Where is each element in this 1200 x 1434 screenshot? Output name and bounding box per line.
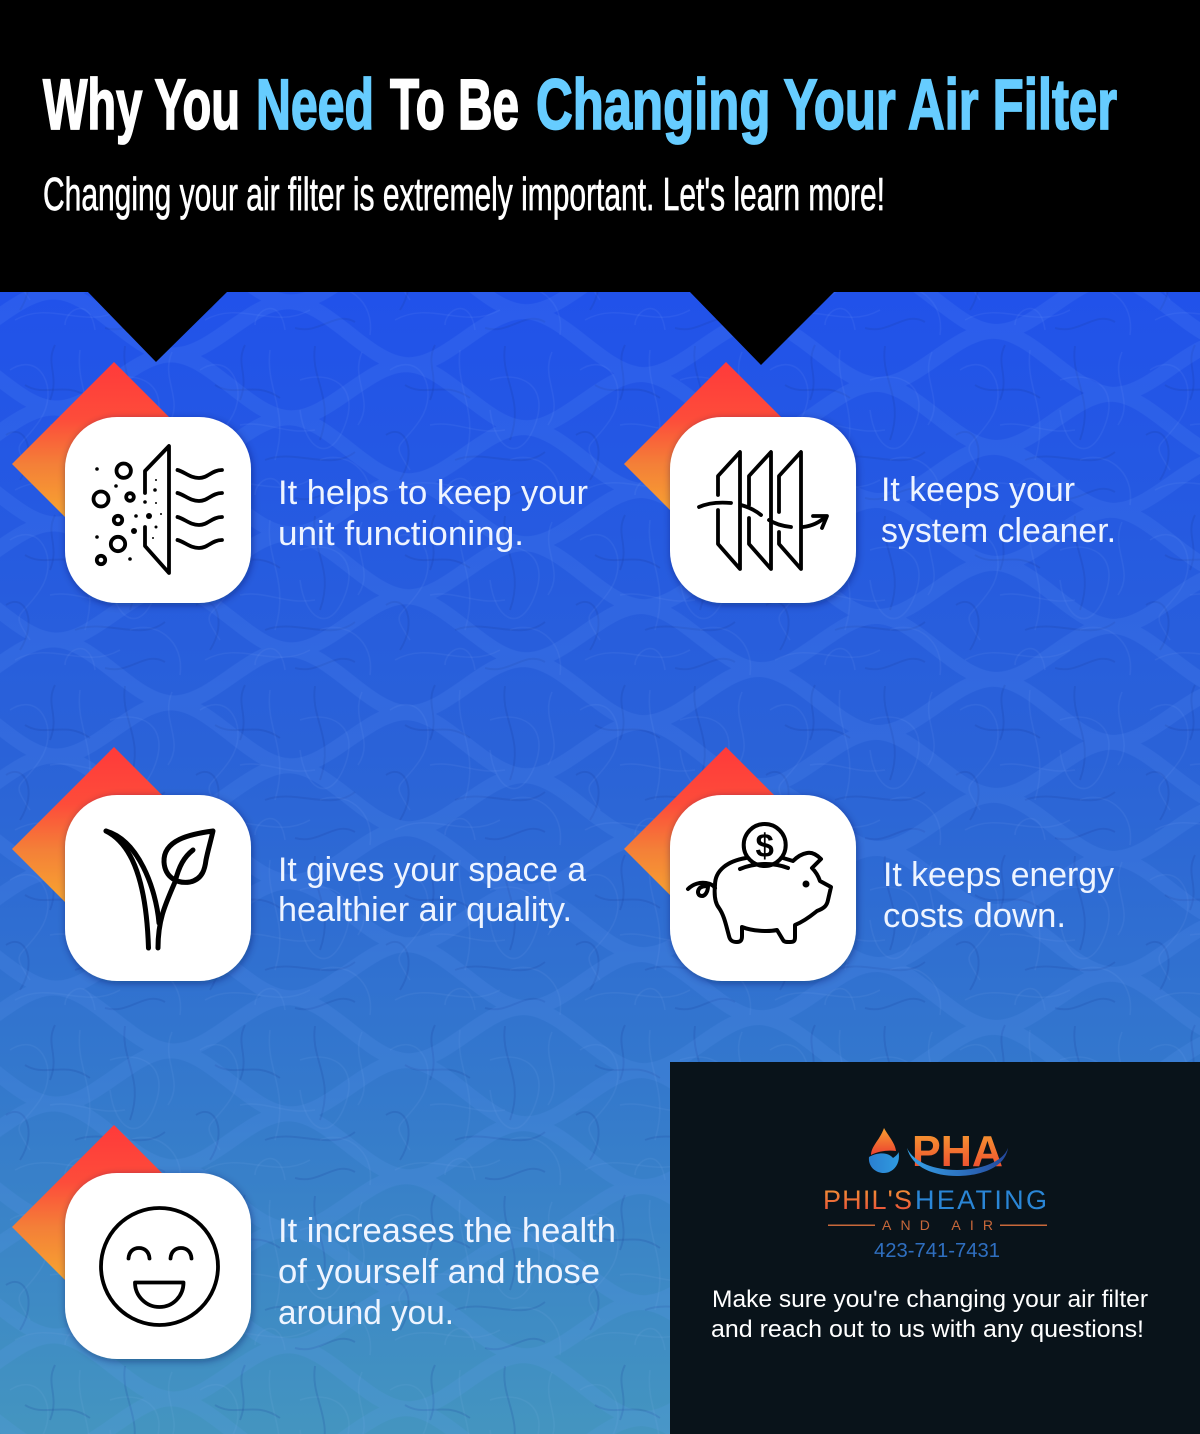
logo: HEATING [915,1185,1047,1215]
item 2: system cleaner [624,362,1116,603]
text [278,474,588,553]
closing message: Make sure you're changing your air filter [712,1286,1148,1313]
icon: particles passing through filter [94,446,222,573]
panel: contact [670,1062,1200,1434]
icon card [670,417,856,603]
closing message [711,1286,1148,1343]
text: costs down. [883,897,1066,935]
text: It keeps your [881,471,1075,509]
icon: piggy bank with coin [688,824,831,942]
title: To Be [390,66,519,145]
icon card [65,795,251,981]
icon card [65,1173,251,1359]
text [278,1212,616,1332]
icon: dollar sign: $ [756,827,774,864]
accent diamond [12,747,216,951]
closing message: and reach out to us with any questions! [711,1316,1144,1343]
accent diamond [624,362,828,566]
text: around you. [278,1294,454,1332]
company name: PHIL'S [823,1185,912,1215]
accent diamond [12,362,216,566]
text [278,851,586,929]
item 3: healthier air quality [12,747,586,981]
text: It increases the health [278,1212,616,1250]
icon card [670,795,856,981]
background: blue filter mesh [0,292,1200,1434]
text: It helps to keep your [278,474,588,512]
icon: layered filter with airflow arrow [699,452,827,569]
phone number: 423-741-7431 [874,1239,1000,1262]
item 4: energy costs [624,747,1114,981]
text: healthier air quality. [278,891,572,929]
item 5: health of those around you [12,1125,616,1359]
title [43,66,1117,145]
text: unit functioning. [278,515,524,553]
text: system cleaner. [881,512,1116,550]
logo [823,1127,1047,1262]
text: of yourself and those [278,1253,600,1291]
title: Need [256,66,374,145]
text: It keeps energy [883,856,1114,894]
icon card [65,417,251,603]
icon: flame and water drop [869,1128,899,1173]
title: Why You [43,66,240,145]
logo letters: PHA [912,1127,1003,1176]
logo swoosh [907,1148,1008,1176]
icon: smiling face [101,1208,218,1325]
text: It gives your space a [278,851,586,889]
accent diamond [12,1125,216,1329]
tagline: AND AIR [882,1217,993,1233]
text [883,856,1114,935]
text [881,471,1116,550]
icon: leaf sprout [106,831,213,948]
item 1: unit functioning [12,362,588,603]
header band [0,0,1200,365]
accent diamond [624,747,828,951]
